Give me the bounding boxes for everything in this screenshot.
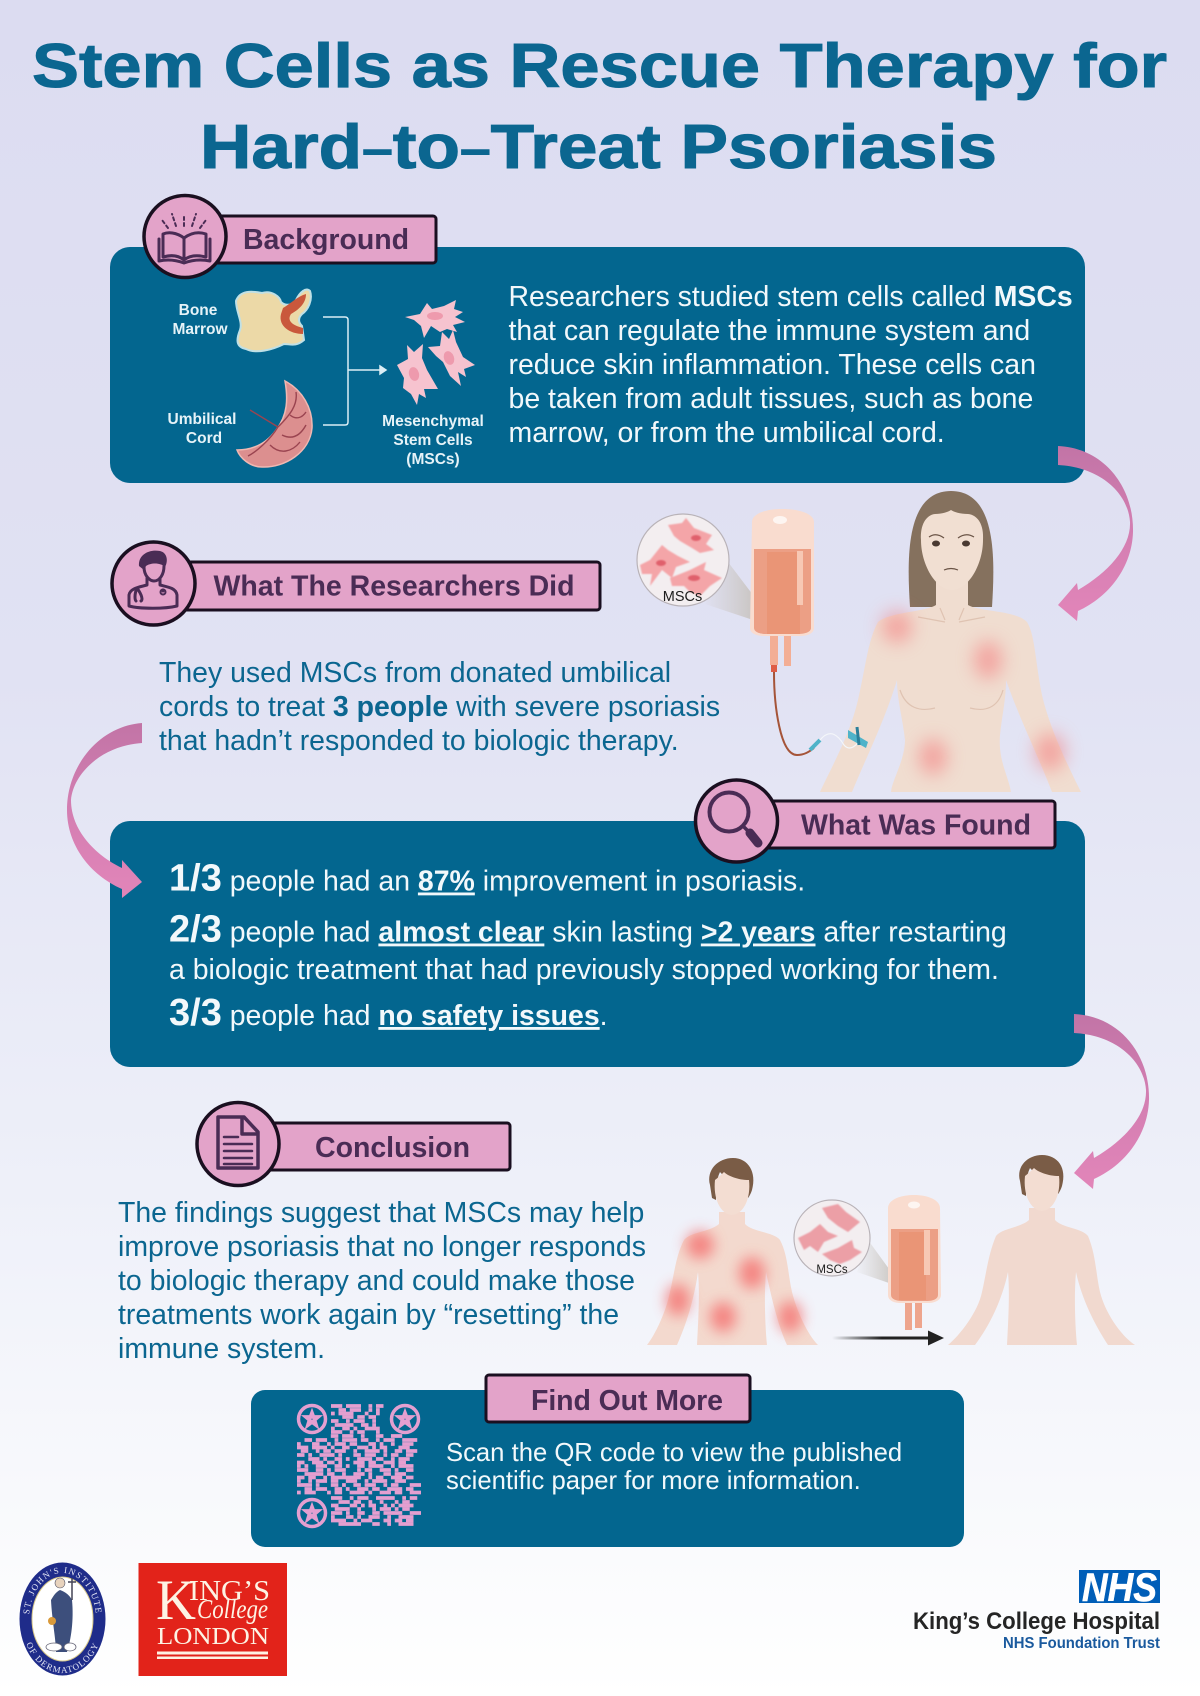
heading: what the researchers did: What The Researchers Did [214, 570, 574, 602]
diagram: MSC sources [168, 290, 484, 468]
callout: MSCs circle [794, 1200, 870, 1276]
icon: doctor [129, 551, 177, 608]
man after treatment [948, 1155, 1135, 1345]
callout: MSCs circle: MSCs [816, 1264, 848, 1276]
QR code [297, 1406, 421, 1526]
label: mesenchymal stem cells: Stem Cells [393, 432, 473, 449]
text: what the researchers did: that hadn’t responded to biologic therapy. [159, 725, 679, 757]
icon: open book [159, 214, 210, 263]
title: – [460, 123, 491, 176]
text: background body: be taken from adult tissues, such as bone [508, 383, 1033, 415]
panel: background [110, 247, 1085, 483]
heading: find out more: Find Out More [531, 1385, 723, 1417]
logo: NHS King's College Hospital: King’s College Hospital [913, 1608, 1160, 1635]
illustration: woman receiving MSC infusion [637, 491, 1081, 792]
treatment arrow [832, 1330, 944, 1346]
arrow: researchers to found [67, 723, 142, 898]
logo: St John's Institute of Dermatology [20, 1562, 106, 1676]
logo: King's College London: K [156, 1569, 196, 1632]
logo: St John's Institute of Dermatology: OF DERMATOLOGY [27, 1642, 98, 1674]
text: conclusion: The findings suggest that MSCs may help [118, 1197, 644, 1229]
icon: magnifying glass [710, 792, 758, 843]
text: conclusion: to biologic therapy and could make those [118, 1265, 635, 1297]
finding: 2/3: 2/3 people had almost clear skin lasting >2 years after restarting [169, 908, 1007, 950]
illustration: treatment before and after [647, 1155, 1135, 1346]
label: umbilical cord: Cord [186, 430, 222, 447]
infusion bag [888, 1195, 941, 1330]
logo: St John's Institute of Dermatology: ST. JOHN'S INSTITUTE [24, 1567, 102, 1614]
heading: what was found [696, 780, 1055, 862]
logo: King's College London: LONDON [157, 1624, 269, 1650]
cone [705, 562, 753, 620]
label: bone marrow: Marrow [172, 321, 229, 338]
callout: MSCs circle: MSCs [663, 589, 702, 605]
text: background body: marrow, or from the umbilical cord. [508, 417, 945, 449]
text: background body: that can regulate the immune system and [508, 315, 1030, 347]
panel: what was found [110, 821, 1085, 1067]
heading: conclusion: Conclusion [315, 1132, 470, 1164]
text: conclusion: improve psoriasis that no longer responds [118, 1231, 646, 1263]
arrow: background to researchers [1058, 446, 1133, 621]
text: scan QR: Scan the QR code to view the published [446, 1439, 902, 1467]
title: to [393, 113, 460, 182]
text: background body: Researchers studied stem cells called MSCs [508, 281, 1073, 313]
text: conclusion: treatments work again by “resetting” the [118, 1299, 619, 1331]
label: umbilical cord: Umbilical [168, 411, 236, 428]
arrow: found to conclusion [1074, 1014, 1149, 1189]
heading: conclusion [197, 1102, 510, 1186]
finding: 3/3: 3/3 people had no safety issues. [169, 992, 608, 1034]
title: – [362, 123, 393, 176]
bracket arrow [323, 317, 386, 425]
text: scan QR: scientific paper for more information. [446, 1467, 861, 1495]
icon: bone marrow [236, 290, 311, 351]
icon: umbilical cord [237, 381, 312, 467]
heading: background: Background [243, 224, 409, 256]
title: Hard [200, 113, 341, 182]
heading: what was found: What Was Found [801, 810, 1031, 842]
title: Treat Psoriasis [491, 113, 997, 182]
logo: NHS King's College Hospital [913, 1566, 1160, 1652]
panel: find out more [251, 1390, 964, 1547]
infusion bag [750, 509, 868, 755]
label: mesenchymal stem cells: Mesenchymal [382, 413, 484, 430]
logo: King's College London: College [197, 1594, 268, 1624]
logo: King's College London [138, 1563, 287, 1676]
heading: background [144, 196, 436, 278]
text: background body: reduce skin inflammation. These cells can [508, 349, 1036, 381]
title: Stem Cells as Rescue Therapy for [32, 32, 1167, 101]
label: mesenchymal stem cells: (MSCs) [406, 451, 460, 468]
woman figure [820, 491, 1081, 792]
heading: what the researchers did [112, 542, 600, 625]
logo: NHS King's College Hospital: NHS [1082, 1566, 1157, 1610]
finding: 2/3: a biologic treatment that had previously stopped working for them. [169, 954, 999, 986]
cone [857, 1240, 892, 1284]
text: conclusion: immune system. [118, 1333, 325, 1365]
finding: 1/3: 1/3 people had an 87% improvement in psoriasis. [169, 858, 805, 900]
callout: MSCs circle [637, 514, 729, 606]
text: what the researchers did: cords to treat 3 people with severe psoriasis [159, 691, 720, 723]
icon: mesenchymal stem cells [397, 300, 475, 405]
man with psoriasis [647, 1158, 818, 1345]
logo: NHS King's College Hospital: NHS Foundation Trust [1003, 1635, 1160, 1652]
title [32, 32, 1167, 182]
icon: document [218, 1117, 258, 1168]
text: what the researchers did: They used MSCs from donated umbilical [159, 657, 671, 689]
label: bone marrow: Bone [179, 302, 218, 319]
heading: find out more [486, 1375, 750, 1422]
logo: King's College London: ING’S [189, 1576, 270, 1607]
